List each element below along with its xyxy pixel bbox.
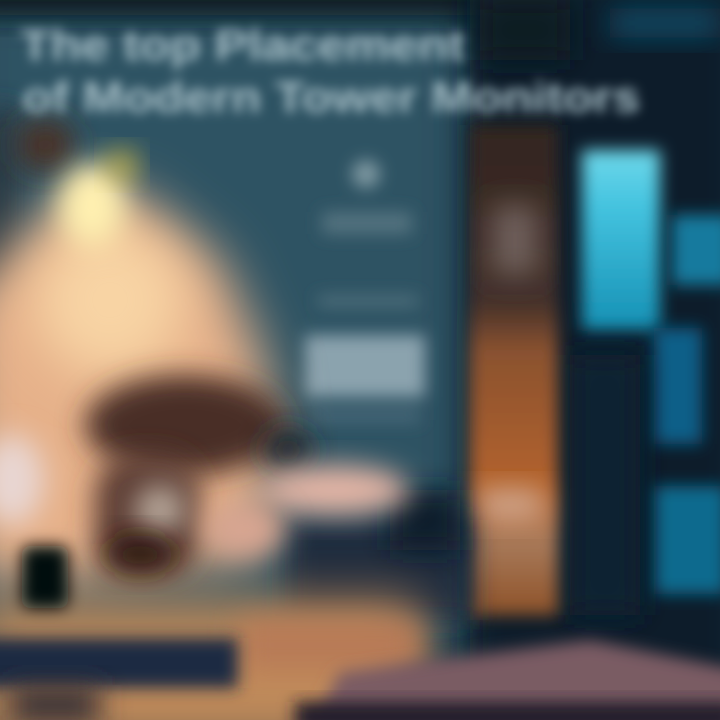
panel: dark central base [285, 490, 470, 620]
title: of Modern Tower Monitors [22, 73, 640, 122]
panel: mauve desk block [295, 640, 720, 720]
table surface [0, 600, 420, 720]
figure: dark head [85, 375, 313, 575]
panel: brown and orange column [470, 125, 558, 615]
title: The top Placement [20, 21, 465, 70]
title [20, 21, 640, 122]
pale highlight object [0, 435, 410, 558]
icon: dark cup [22, 546, 68, 608]
panel: right cyan screens [480, 0, 720, 615]
panel: dark keyboard band [0, 638, 238, 720]
panel: central wall text block [305, 160, 425, 422]
lamp glow [0, 120, 280, 590]
